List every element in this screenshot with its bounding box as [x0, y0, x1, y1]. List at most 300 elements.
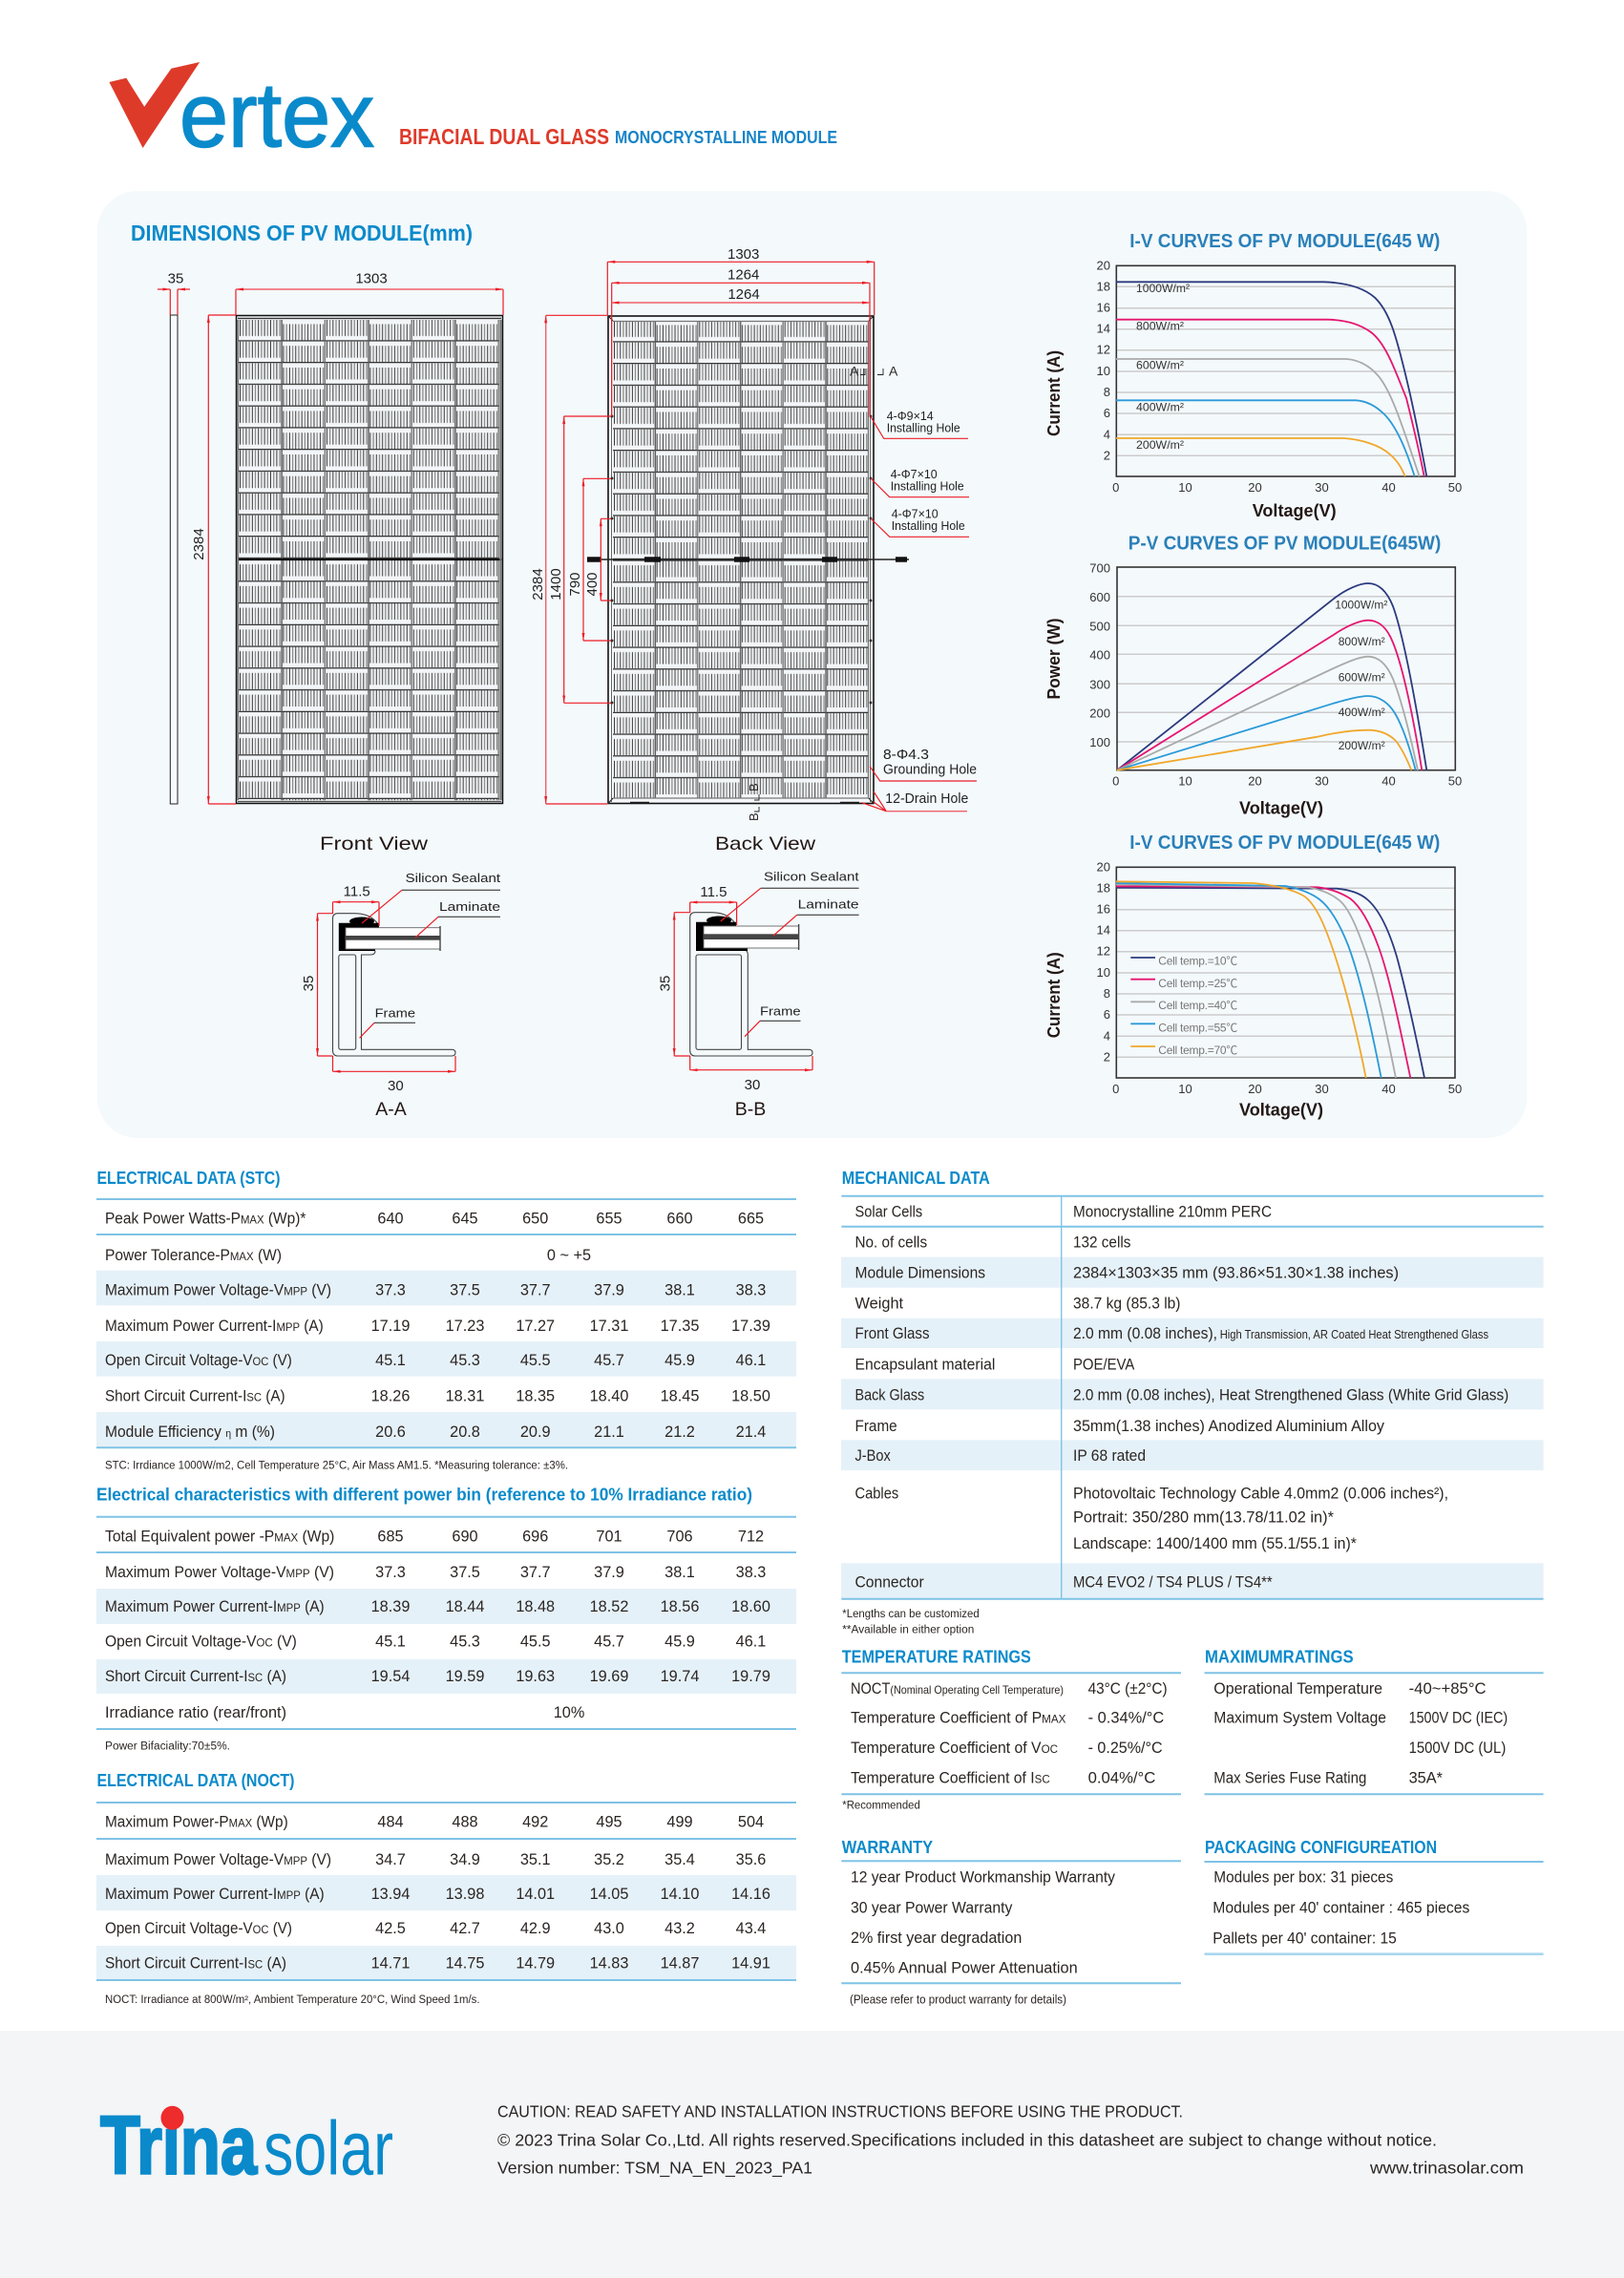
notes: customization: **Available in either option	[842, 1625, 974, 1636]
chart: P-V curves by irradiance: 0	[1112, 774, 1119, 789]
row: maximum power voltage: 35.1	[520, 1851, 551, 1868]
table: maximum ratings: 35A*	[1409, 1770, 1444, 1787]
row: short circuit current	[105, 1955, 770, 1972]
chart: I-V curves by irradiance: 20	[1097, 258, 1110, 273]
back view dimensions: 1264	[728, 267, 759, 284]
chart: I-V curves by irradiance: 800W/m²	[1136, 320, 1184, 333]
table: electrical data STC: ELECTRICAL DATA (STC)	[97, 1169, 281, 1188]
row: maximum power voltage: 37.9	[594, 1282, 624, 1299]
product subtitle: BIFACIAL DUAL GLASS	[399, 124, 609, 149]
table: electrical characteristics by power bin	[96, 1486, 796, 1753]
temperature legend: Cell temp.=10℃	[1158, 955, 1237, 968]
row: maximum power voltage: 38.1	[664, 1282, 695, 1299]
mechanical row values: Portrait: 350/280 mm(13.78/11.02 in)*	[1073, 1508, 1335, 1526]
table: temperature ratings: Temperature Coefficient of VOC	[851, 1740, 1058, 1757]
row: module efficiency: 21.4	[736, 1424, 766, 1441]
callout: installing hole 7x10 upper: Installing Hole	[891, 479, 964, 494]
chart: P-V curves by irradiance: P-V CURVES OF PV MODULE(645W)	[1128, 534, 1441, 555]
row: maximum power current	[105, 1598, 770, 1615]
mechanical row labels	[855, 1203, 995, 1592]
row: irradiance ratio: Irradiance ratio (rear/front)	[105, 1704, 286, 1721]
chart: I-V curves by irradiance: 10	[1097, 364, 1110, 378]
back view module drawing	[587, 316, 909, 804]
callout: installing hole 9x14	[871, 409, 968, 438]
row: module efficiency	[105, 1424, 766, 1441]
B-B callouts: Silicon Sealant	[764, 869, 859, 883]
row: open circuit voltage: 45.7	[594, 1352, 624, 1369]
row: total equivalent power: 690	[452, 1528, 478, 1545]
row: maximum power voltage: 35.6	[736, 1851, 766, 1868]
row: maximum power voltage: 37.3	[375, 1282, 406, 1299]
row: short circuit current: 19.74	[661, 1668, 699, 1685]
row: module efficiency: 20.6	[375, 1424, 406, 1441]
logo: Vertex	[109, 62, 374, 166]
mechanical row labels: Solar Cells	[855, 1203, 922, 1220]
row: open circuit voltage: 45.1	[375, 1352, 406, 1369]
row: maximum power: 495	[596, 1814, 622, 1831]
row: short circuit current	[105, 1387, 770, 1404]
table: temperature ratings	[841, 1648, 1181, 1811]
mechanical row labels: J-Box	[855, 1447, 891, 1465]
chart: I-V curves by irradiance: 14	[1097, 322, 1110, 336]
A-A dimensions: 11.5	[344, 883, 370, 899]
row: short circuit current: 18.40	[590, 1387, 628, 1404]
row: open circuit voltage	[105, 1920, 766, 1937]
front view dimensions: 2384	[191, 528, 207, 560]
chart: P-V curves by irradiance: 100	[1089, 735, 1110, 749]
row: maximum power voltage: 37.7	[520, 1282, 551, 1299]
row: maximum power current	[105, 1318, 770, 1335]
A-A callouts: Frame	[375, 1005, 415, 1020]
chart: P-V curves by irradiance: 20	[1248, 774, 1262, 789]
row: peak power: 640	[377, 1211, 404, 1228]
callout: installing hole 9x14: Installing Hole	[887, 420, 960, 435]
row: short circuit current: 18.45	[661, 1387, 699, 1404]
row: power tolerance: Power Tolerance-PMAX (W)	[105, 1247, 282, 1264]
back view dimensions: 790	[567, 572, 583, 597]
callout: grounding hole	[870, 747, 977, 781]
row: open circuit voltage: 43.2	[664, 1920, 695, 1937]
mechanical row values: 132 cells	[1073, 1234, 1130, 1251]
row: short circuit current: Short Circuit Current-ISC (A)	[105, 1387, 285, 1404]
footer text: version: Version number: TSM_NA_EN_2023_PA1	[497, 2159, 812, 2179]
row: total equivalent power: 712	[738, 1528, 764, 1545]
junction cable and connectors	[587, 559, 909, 560]
table: electrical data NOCT: ELECTRICAL DATA (NOCT)	[97, 1771, 294, 1790]
callout: installing hole 9x14: 4-Φ9×14	[887, 409, 934, 423]
chart: I-V curves by cell temperature: 14	[1097, 923, 1110, 938]
row: maximum power current: Maximum Power Current-IMPP (A)	[105, 1886, 325, 1903]
chart: I-V curves by irradiance: 6	[1104, 406, 1110, 420]
row: maximum power: 484	[377, 1814, 404, 1831]
row: short circuit current: 14.87	[661, 1955, 699, 1972]
row: short circuit current: 18.31	[446, 1387, 484, 1404]
mechanical row values: Monocrystalline 210mm PERC	[1073, 1203, 1272, 1220]
row: maximum power: 492	[522, 1814, 548, 1831]
row: peak power: 660	[666, 1211, 693, 1228]
chart: I-V curves by irradiance: 20	[1248, 480, 1262, 495]
chart: I-V curves by irradiance: 16	[1097, 301, 1110, 315]
callout: installing hole 7x10 lower: 4-Φ7×10	[892, 507, 939, 521]
side view with dimension: 35	[168, 271, 183, 287]
table: warranty: WARRANTY	[842, 1838, 933, 1857]
row: total equivalent power: 701	[596, 1528, 622, 1545]
chart: I-V curves by irradiance: 8	[1104, 385, 1110, 399]
row: short circuit current	[105, 1668, 770, 1685]
row: total equivalent power: 685	[377, 1528, 404, 1545]
chart: I-V curves by irradiance: 10	[1178, 480, 1192, 495]
row: maximum power: 499	[666, 1814, 693, 1831]
back view dimensions: 400	[584, 572, 601, 597]
row: open circuit voltage: Open Circuit Voltage-VOC (V)	[105, 1352, 292, 1369]
row: maximum power current: 14.10	[661, 1886, 699, 1903]
footer text: copyright: © 2023 Trina Solar Co.,Ltd. All rights reserved.Specifications included in this datasheet are subject to change without notice.	[497, 2130, 1437, 2149]
table: electrical data NOCT	[96, 1771, 796, 2006]
row: open circuit voltage: 43.0	[594, 1920, 624, 1937]
row: maximum power current: 18.39	[371, 1598, 410, 1615]
row: open circuit voltage: 46.1	[736, 1352, 766, 1369]
chart: P-V curves by irradiance: 800W/m²	[1339, 635, 1385, 648]
row: maximum power current: 13.94	[371, 1886, 410, 1903]
chart: P-V curves by irradiance: 500	[1089, 619, 1110, 634]
row: maximum power voltage: 37.7	[520, 1564, 551, 1581]
row: peak power: Peak Power Watts-PMAX (Wp)*	[105, 1211, 306, 1228]
row: irradiance ratio: 10%	[554, 1704, 584, 1721]
row: short circuit current: 14.83	[590, 1955, 628, 1972]
row: maximum power	[105, 1814, 764, 1831]
table: mechanical data: MECHANICAL DATA	[842, 1169, 990, 1188]
chart: I-V curves by cell temperature: Current (A)	[1044, 952, 1064, 1038]
chart: I-V curves by irradiance: 40	[1381, 480, 1396, 495]
table: temperature ratings: - 0.34%/°C	[1088, 1709, 1164, 1726]
mechanical row values: MC4 EVO2 / TS4 PLUS / TS4**	[1073, 1574, 1273, 1592]
row: open circuit voltage: 45.3	[450, 1352, 480, 1369]
mechanical row values: Photovoltaic Technology Cable 4.0mm2 (0.006 inches²),	[1073, 1485, 1448, 1502]
row: maximum power current: 17.27	[516, 1318, 555, 1335]
note: NOCT conditions: NOCT: Irradiance at 800W/m², Ambient Temperature 20°C, Wind Speed 1m/s.	[105, 1994, 479, 2006]
row: maximum power voltage: 38.3	[736, 1564, 766, 1581]
chart: I-V curves by cell temperature	[1044, 833, 1462, 1119]
callout: installing hole 7x10 lower: Installing Hole	[892, 518, 965, 533]
row: short circuit current: 18.26	[371, 1387, 410, 1404]
row: maximum power voltage: 34.9	[450, 1851, 480, 1868]
mechanical row labels: Module Dimensions	[855, 1264, 985, 1281]
chart: I-V curves by irradiance: 12	[1097, 343, 1110, 357]
notes: customization: *Lengths can be customized	[842, 1609, 980, 1620]
B-B callouts: Laminate	[798, 897, 859, 912]
row: maximum power current: 17.39	[731, 1318, 770, 1335]
table: warranty	[841, 1838, 1181, 2006]
row: maximum power current: Maximum Power Current-IMPP (A)	[105, 1598, 325, 1615]
chart: I-V curves by irradiance: 30	[1315, 480, 1329, 495]
notes: customization	[842, 1609, 980, 1636]
callout: installing hole 7x10 lower	[871, 507, 969, 537]
chart: I-V curves by cell temperature: 4	[1104, 1028, 1110, 1043]
A-A callouts	[360, 871, 500, 1038]
chart: I-V curves by irradiance: 200W/m²	[1136, 438, 1184, 452]
row: short circuit current: 18.50	[731, 1387, 770, 1404]
row: open circuit voltage: 43.4	[736, 1920, 766, 1937]
table: maximum ratings: Maximum System Voltage	[1213, 1709, 1386, 1726]
row: maximum power current: 18.52	[590, 1598, 628, 1615]
mechanical row labels: Connector	[855, 1574, 924, 1592]
mechanical row labels: No. of cells	[855, 1234, 927, 1251]
chart: I-V curves by irradiance: 50	[1448, 480, 1462, 495]
mechanical row values: IP 68 rated	[1073, 1447, 1146, 1465]
note: STC conditions: STC: Irrdiance 1000W/m2, Cell Temperature 25°C, Air Mass AM1.5. *Measuring tolerance: ±3%.	[105, 1460, 568, 1471]
row: open circuit voltage: 42.5	[375, 1920, 406, 1937]
table: maximum ratings: Max Series Fuse Rating	[1213, 1770, 1366, 1787]
table: packaging configuration: Modules per box: 31 pieces	[1213, 1869, 1393, 1887]
section marks A and B	[747, 363, 898, 821]
row: open circuit voltage: Open Circuit Voltage-VOC (V)	[105, 1920, 292, 1937]
table: warranty: 12 year Product Workmanship Warranty	[851, 1869, 1116, 1887]
footer band	[0, 2031, 1624, 2278]
logo: Trinasolar	[100, 2100, 393, 2192]
row: maximum power current: 13.98	[446, 1886, 484, 1903]
chart: I-V curves by cell temperature: I-V CURVES OF PV MODULE(645 W)	[1129, 833, 1440, 854]
row: maximum power current: 18.48	[516, 1598, 555, 1615]
table: temperature ratings: 43°C (±2°C)	[1088, 1680, 1168, 1698]
back view dimensions: 2384	[530, 568, 546, 601]
chart: P-V curves by irradiance: 10	[1178, 774, 1192, 789]
chart: I-V curves by cell temperature: 6	[1104, 1007, 1110, 1022]
B-B dimensions: 35	[657, 976, 674, 991]
chart: P-V curves by irradiance: 30	[1315, 774, 1329, 789]
row: maximum power current: 18.44	[446, 1598, 484, 1615]
table: maximum ratings: MAXIMUMRATINGS	[1205, 1648, 1354, 1667]
chart: I-V curves by cell temperature: 10	[1178, 1082, 1192, 1096]
chart: P-V curves by irradiance: 400	[1089, 647, 1110, 663]
chart: P-V curves by irradiance: 200W/m²	[1339, 739, 1385, 752]
B-B callouts	[721, 869, 859, 1037]
row: short circuit current: 14.79	[516, 1955, 555, 1972]
row: peak power: 665	[738, 1211, 764, 1228]
back view dimensions: 1303	[728, 246, 759, 263]
front view dimensions	[191, 271, 503, 804]
logo: Trinasolar: solar	[264, 2106, 393, 2191]
row: total equivalent power: 696	[522, 1528, 548, 1545]
label: B-B: B-B	[735, 1099, 766, 1120]
table: temperature ratings: TEMPERATURE RATINGS	[842, 1648, 1031, 1667]
row: short circuit current: Short Circuit Current-ISC (A)	[105, 1668, 286, 1685]
back view dimensions: 1400	[548, 568, 564, 601]
A-A callouts: Laminate	[439, 899, 500, 914]
table: maximum ratings	[1205, 1648, 1544, 1794]
row: maximum power current: 18.60	[731, 1598, 770, 1615]
mechanical row labels: Front Glass	[855, 1325, 930, 1342]
mechanical row labels: Frame	[855, 1418, 897, 1435]
row: maximum power voltage: Maximum Power Voltage-VMPP (V)	[105, 1851, 331, 1868]
B-B callouts: Frame	[760, 1003, 800, 1018]
chart: P-V curves by irradiance: 50	[1448, 774, 1462, 789]
table: packaging configuration: Modules per 40' container : 465 pieces	[1213, 1899, 1469, 1916]
chart: P-V curves by irradiance: 400W/m²	[1339, 706, 1385, 719]
note: recommended: *Recommended	[842, 1800, 920, 1811]
row: open circuit voltage: 45.5	[520, 1352, 551, 1369]
table: warranty: 30 year Power Warranty	[851, 1899, 1013, 1916]
chart: I-V curves by irradiance: 1000W/m²	[1136, 282, 1190, 295]
chart: P-V curves by irradiance	[1044, 534, 1462, 818]
callout: grounding hole: 8-Φ4.3	[883, 747, 929, 763]
table: temperature ratings: Temperature Coefficient of ISC	[851, 1770, 1050, 1787]
row: open circuit voltage: 45.5	[520, 1633, 551, 1650]
callout: drain hole	[862, 791, 968, 812]
row: peak power: 645	[452, 1211, 478, 1228]
row: peak power	[105, 1211, 764, 1228]
callout: drain hole: 12-Drain Hole	[885, 791, 968, 807]
row: module efficiency: Module Efficiency η m (%)	[105, 1424, 275, 1441]
row: maximum power current: 14.01	[516, 1886, 555, 1903]
row: maximum power voltage: 38.1	[664, 1564, 695, 1581]
chart: P-V curves by irradiance: Voltage(V)	[1239, 799, 1323, 818]
B-B dimensions	[657, 884, 812, 1093]
row: open circuit voltage: 46.1	[736, 1633, 766, 1650]
B-B dimensions: 30	[745, 1077, 760, 1093]
callout: grounding hole: Grounding Hole	[883, 762, 977, 778]
table: temperature ratings: Temperature Coefficient of PMAX	[851, 1709, 1065, 1726]
B-B dimensions: 11.5	[700, 884, 727, 900]
row: power tolerance	[105, 1247, 591, 1264]
table: electrical characteristics by power bin: Electrical characteristics with different power bin (reference to 10% Irradiance ratio)	[96, 1486, 752, 1505]
table: maximum ratings: Operational Temperature	[1213, 1680, 1382, 1698]
back view dimensions: 1264	[728, 286, 760, 303]
row: open circuit voltage: 45.3	[450, 1633, 480, 1650]
row: maximum power current: 18.56	[661, 1598, 699, 1615]
chart: P-V curves by irradiance: 600W/m²	[1339, 670, 1385, 684]
table: warranty: 2% first year degradation	[851, 1930, 1022, 1947]
chart: I-V curves by cell temperature: 10	[1097, 965, 1110, 980]
mechanical row labels: Cables	[855, 1485, 898, 1502]
row: short circuit current: 14.91	[731, 1955, 770, 1972]
row: total equivalent power	[105, 1528, 764, 1545]
chart: I-V curves by cell temperature: Voltage(V)	[1239, 1100, 1323, 1119]
chart: I-V curves by irradiance: 400W/m²	[1136, 401, 1184, 414]
chart: I-V curves by cell temperature: 20	[1248, 1082, 1262, 1096]
row: module efficiency: 20.9	[520, 1424, 551, 1441]
front view dimensions: 1303	[355, 271, 388, 287]
mechanical row labels: Weight	[855, 1295, 904, 1312]
chart: I-V curves by irradiance: 18	[1097, 279, 1110, 294]
chart: I-V curves by cell temperature: 0	[1112, 1082, 1119, 1096]
footer text: website: www.trinasolar.com	[1369, 2159, 1524, 2178]
row: maximum power voltage	[105, 1282, 766, 1299]
chart: P-V curves by irradiance: 40	[1381, 774, 1396, 789]
row: maximum power voltage: Maximum Power Voltage-VMPP (V)	[105, 1282, 331, 1299]
row: maximum power voltage	[105, 1851, 766, 1868]
temperature legend: Cell temp.=70℃	[1158, 1044, 1237, 1057]
back view dimensions	[530, 246, 875, 804]
row: maximum power voltage: 38.3	[736, 1282, 766, 1299]
row: power tolerance: 0 ~ +5	[547, 1247, 591, 1264]
chart: P-V curves by irradiance: 700	[1089, 561, 1110, 575]
row: module efficiency: 21.2	[664, 1424, 695, 1441]
row: maximum power: Maximum Power-PMAX (Wp)	[105, 1814, 288, 1831]
row: maximum power current: Maximum Power Current-IMPP (A)	[105, 1318, 324, 1335]
mechanical row values: 2384×1303×35 mm (93.86×51.30×1.38 inches)	[1073, 1264, 1399, 1281]
product subtitle: MONOCRYSTALLINE MODULE	[615, 128, 837, 147]
label: A-A: A-A	[375, 1099, 407, 1120]
chart: I-V curves by irradiance: I-V CURVES OF PV MODULE(645 W)	[1129, 231, 1440, 252]
section marks A and B: B	[747, 812, 761, 821]
row: maximum power current: 14.16	[731, 1886, 770, 1903]
chart: I-V curves by cell temperature: 50	[1448, 1082, 1462, 1096]
row: open circuit voltage: 42.9	[520, 1920, 551, 1937]
row: maximum power: 504	[738, 1814, 764, 1831]
row: maximum power voltage: Maximum Power Voltage-VMPP (V)	[105, 1564, 334, 1581]
A-A dimensions: 30	[388, 1078, 404, 1094]
mechanical row values	[1073, 1203, 1508, 1592]
row: short circuit current: 19.79	[731, 1668, 770, 1685]
chart: I-V curves by irradiance: 2	[1104, 448, 1110, 462]
row: open circuit voltage: 45.9	[664, 1352, 695, 1369]
chart: I-V curves by cell temperature: 20	[1097, 859, 1110, 875]
row: maximum power current: 17.31	[590, 1318, 628, 1335]
row: maximum power current: 14.05	[590, 1886, 628, 1903]
row: maximum power voltage: 37.3	[375, 1564, 406, 1581]
A-A dimensions	[301, 883, 455, 1094]
row: irradiance ratio	[105, 1704, 584, 1721]
row: maximum power voltage: 34.7	[375, 1851, 406, 1868]
row: maximum power current: 17.23	[446, 1318, 484, 1335]
row: short circuit current: 18.35	[516, 1387, 555, 1404]
row: maximum power current: 17.35	[661, 1318, 699, 1335]
row: maximum power voltage: 37.9	[594, 1564, 624, 1581]
row: open circuit voltage: 45.1	[375, 1633, 406, 1650]
mechanical row values: Landscape: 1400/1400 mm (55.1/55.1 in)*	[1073, 1535, 1358, 1552]
panel: dimensions and curves	[97, 191, 1527, 1138]
section marks A and B: A	[850, 363, 859, 378]
chart: I-V curves by irradiance: Voltage(V)	[1253, 501, 1337, 520]
chart: I-V curves by cell temperature: 40	[1381, 1082, 1396, 1096]
section A-A drawing	[301, 871, 500, 1094]
table: mechanical data	[841, 1169, 1544, 1636]
mechanical row values: 2.0 mm (0.08 inches),	[1073, 1325, 1217, 1342]
chart: P-V curves by irradiance: 200	[1089, 707, 1110, 720]
row: maximum power voltage	[105, 1564, 766, 1581]
A-A callouts: Silicon Sealant	[406, 871, 500, 885]
row: open circuit voltage: 42.7	[450, 1920, 480, 1937]
temperature legend: Cell temp.=55℃	[1158, 1022, 1237, 1035]
row: total equivalent power: 706	[666, 1528, 693, 1545]
chart: I-V curves by cell temperature: 16	[1097, 902, 1110, 917]
chart: I-V curves by cell temperature: 18	[1097, 880, 1110, 896]
chart: I-V curves by cell temperature: 30	[1315, 1082, 1329, 1096]
row: open circuit voltage: 45.7	[594, 1633, 624, 1650]
temperature legend: Cell temp.=25℃	[1158, 977, 1237, 990]
table: packaging configuration: Pallets per 40' container: 15	[1213, 1930, 1397, 1948]
table: temperature ratings: NOCT(Nominal Operating Cell Temperature)	[851, 1680, 1064, 1698]
table: warranty: 0.45% Annual Power Attenuation	[851, 1960, 1078, 1977]
chart: I-V curves by cell temperature: 8	[1104, 986, 1110, 1001]
row: module efficiency: 21.1	[594, 1424, 624, 1441]
row: short circuit current: 14.75	[446, 1955, 484, 1972]
row: short circuit current: Short Circuit Current-ISC (A)	[105, 1955, 286, 1972]
row: maximum power voltage: 37.5	[450, 1282, 480, 1299]
table: temperature ratings: 0.04%/°C	[1088, 1770, 1156, 1787]
row: open circuit voltage	[105, 1352, 766, 1369]
section marks A and B: B	[747, 783, 761, 791]
mechanical row labels: Back Glass	[855, 1387, 924, 1404]
row: open circuit voltage: Open Circuit Voltage-VOC (V)	[105, 1633, 297, 1650]
mechanical row values: 38.7 kg (85.3 lb)	[1073, 1295, 1180, 1312]
chart: I-V curves by irradiance: Current (A)	[1044, 350, 1064, 436]
row: short circuit current: 19.69	[590, 1668, 628, 1685]
mechanical row values: High Transmission, AR Coated Heat Strengthened Glass	[1220, 1328, 1488, 1341]
chart: I-V curves by cell temperature: 2	[1104, 1049, 1110, 1064]
row: maximum power current	[105, 1886, 770, 1903]
temperature legend: Cell temp.=40℃	[1158, 999, 1237, 1012]
